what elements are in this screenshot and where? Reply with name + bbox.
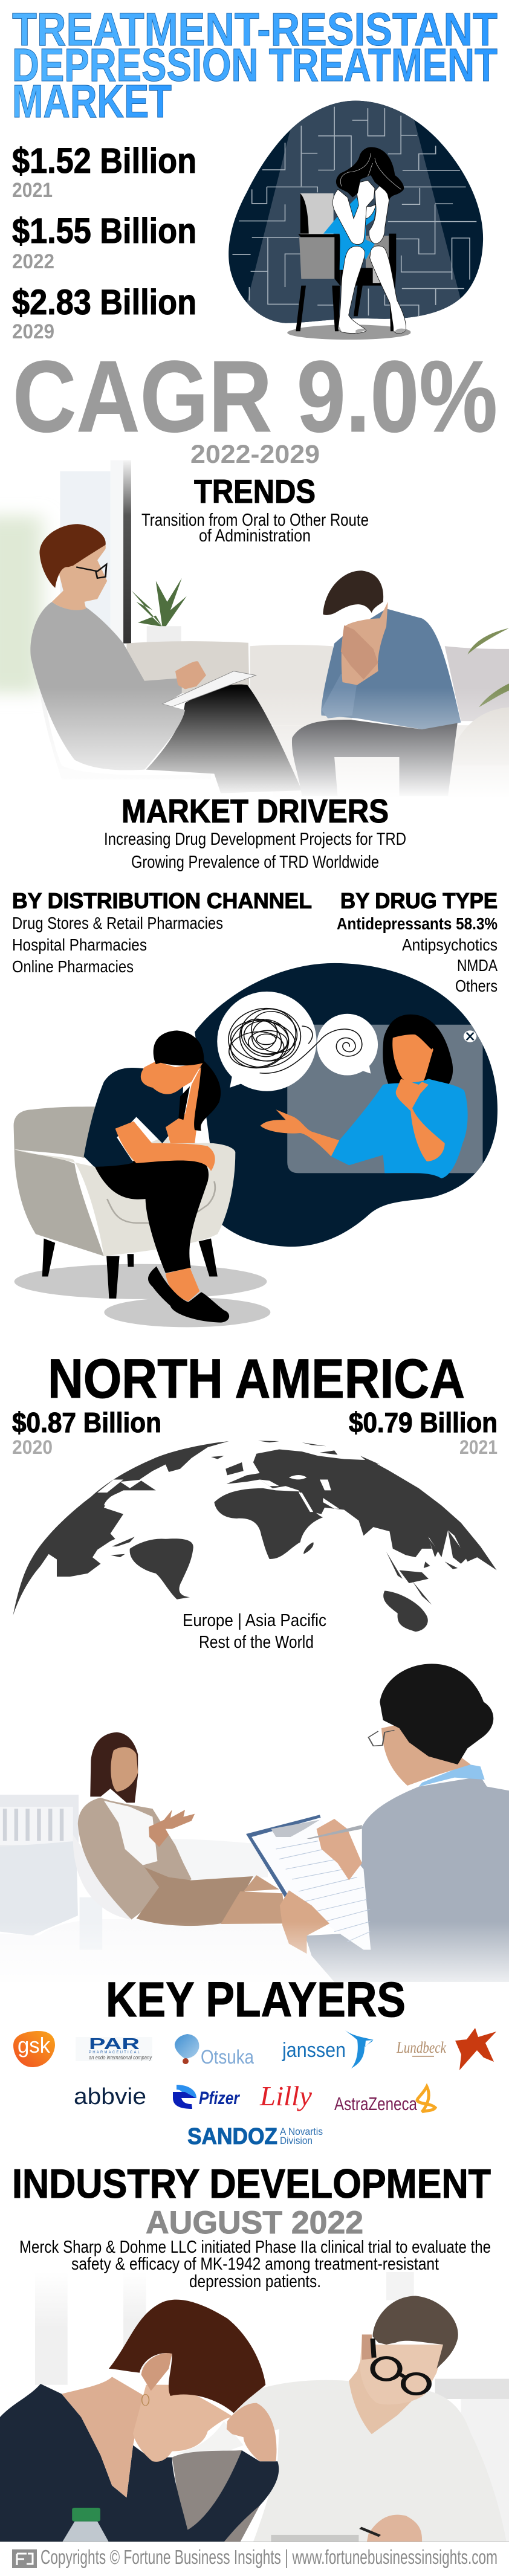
logo: Lundbeck: Lundbeck bbox=[396, 2039, 446, 2056]
heading: key players: KEY PLAYERS bbox=[106, 1972, 406, 2027]
plant bbox=[131, 578, 187, 643]
logo: gsk: gsk bbox=[18, 2033, 51, 2058]
logo: Par Pharmaceutical bbox=[76, 2035, 152, 2061]
logo: AstraZeneca: AstraZeneca bbox=[334, 2093, 418, 2114]
logo: Pfizer bbox=[173, 2085, 241, 2109]
trend text: Transition from Oral to Other Route bbox=[141, 511, 369, 530]
by drug type bbox=[337, 888, 498, 995]
logo: Janssen bbox=[282, 2030, 374, 2068]
value 2021: $0.79 Billion bbox=[349, 1407, 498, 1438]
date: AUGUST 2022 bbox=[146, 2205, 363, 2241]
channel list: Drug Stores & Retail Pharmacies bbox=[12, 914, 223, 932]
sofa bbox=[126, 628, 509, 798]
driver list bbox=[104, 830, 406, 872]
illustration: online therapy session bbox=[14, 963, 498, 1327]
shadow between figures bbox=[172, 2450, 260, 2542]
by drug type: BY DRUG TYPE bbox=[340, 888, 498, 913]
logo: Pfizer: Pfizer bbox=[199, 2088, 241, 2108]
logo: AbbVie: abbvie bbox=[74, 2084, 146, 2110]
patient bbox=[73, 1732, 286, 1926]
regions list bbox=[183, 1611, 326, 1652]
logo: Otsuka: Otsuka bbox=[201, 2046, 254, 2068]
region heading: North America bbox=[12, 1348, 498, 1458]
patient bbox=[292, 570, 461, 796]
by distribution channel bbox=[12, 888, 312, 976]
value 2021: $1.52 Billion bbox=[12, 141, 196, 181]
therapist on screen bbox=[261, 1015, 468, 1178]
key player logos bbox=[13, 2028, 496, 2149]
value 2022: 2022 bbox=[12, 250, 54, 273]
heading: trends: TRENDS bbox=[194, 473, 316, 510]
scribble and spiral bbox=[221, 999, 362, 1077]
speech bubbles bbox=[217, 992, 378, 1091]
floor shadows bbox=[15, 1264, 270, 1327]
doctor bbox=[246, 1664, 509, 1982]
driver list: Growing Prevalence of TRD Worldwide bbox=[131, 853, 379, 872]
drug type list: Others bbox=[455, 976, 498, 995]
water bottle bbox=[62, 2508, 109, 2542]
chair and woman bbox=[291, 147, 410, 339]
market drivers bbox=[104, 792, 406, 872]
sofa and room bbox=[0, 1795, 331, 1982]
seated person bbox=[84, 1030, 229, 1323]
therapist bbox=[30, 524, 302, 793]
world map bbox=[13, 1441, 497, 1632]
value 2020 bbox=[12, 1407, 161, 1458]
logo: Janssen: janssen bbox=[282, 2039, 346, 2062]
CAGR figure: 2022-2029 bbox=[190, 440, 320, 469]
room background bbox=[0, 460, 131, 693]
woman bbox=[0, 2300, 279, 2542]
photo: stressed woman and man with glasses bbox=[0, 2272, 509, 2542]
drug type list: NMDA bbox=[457, 956, 498, 975]
logo: Par Pharmaceutical: an endo international company bbox=[89, 2055, 152, 2061]
video close button bbox=[464, 1030, 476, 1042]
by distribution channel: BY DISTRIBUTION CHANNEL bbox=[12, 888, 312, 913]
value 2020: $0.87 Billion bbox=[12, 1407, 161, 1438]
bottom fade bbox=[0, 688, 509, 799]
armchair bbox=[14, 1106, 235, 1299]
value 2021: 2021 bbox=[12, 179, 53, 202]
driver list: Increasing Drug Development Projects for TRD bbox=[104, 830, 406, 849]
trend text: of Administration bbox=[199, 526, 311, 546]
illustration: woman in chair crying bbox=[229, 90, 483, 340]
value 2029: 2029 bbox=[12, 320, 54, 343]
value 2022: $1.55 Billion bbox=[12, 211, 196, 251]
industry development bbox=[12, 2161, 491, 2291]
logo: Sandoz: SANDOZ bbox=[187, 2124, 277, 2149]
backdrop blob with maze bbox=[229, 90, 483, 340]
regions list: Rest of the World bbox=[199, 1633, 314, 1652]
value 2021 bbox=[349, 1407, 498, 1458]
logo: Lundbeck bbox=[396, 2028, 496, 2070]
market values bbox=[12, 141, 196, 343]
development text: safety & efficacy of MK-1942 among treatment-resistant bbox=[71, 2255, 439, 2274]
channel list: Hospital Pharmacies bbox=[12, 935, 147, 954]
drug type list: Antipsychotics bbox=[402, 935, 498, 954]
channel list: Online Pharmacies bbox=[12, 957, 134, 976]
logo: Par Pharmaceutical: PAR bbox=[89, 2035, 140, 2053]
drug type list bbox=[337, 914, 498, 995]
title: MARKET bbox=[12, 76, 172, 128]
logo: Fortune Business Insights bbox=[12, 2549, 37, 2568]
regions list: Europe | Asia Pacific bbox=[183, 1611, 326, 1630]
development text bbox=[19, 2238, 491, 2291]
man bbox=[174, 2296, 461, 2542]
value 2022 bbox=[12, 211, 196, 273]
logo: Sandoz: Division bbox=[280, 2135, 313, 2146]
logo: gsk bbox=[13, 2031, 55, 2067]
channel list bbox=[12, 914, 223, 976]
logo: Lilly: Lilly bbox=[259, 2080, 313, 2111]
value 2020: 2020 bbox=[12, 1436, 53, 1458]
logo: Otsuka bbox=[175, 2034, 254, 2068]
trend text bbox=[141, 511, 369, 546]
value 2021: 2021 bbox=[459, 1436, 498, 1458]
title bbox=[12, 4, 498, 128]
photo: therapist and patient on sofa bbox=[0, 460, 509, 799]
development text: depression patients. bbox=[189, 2272, 321, 2291]
footer bbox=[12, 2546, 498, 2568]
background bbox=[35, 2272, 509, 2542]
value 2029: $2.83 Billion bbox=[12, 283, 196, 322]
photo: patient and doctor with clipboard bbox=[0, 1664, 509, 1982]
value 2021 bbox=[12, 141, 196, 202]
heading: trends bbox=[141, 473, 369, 546]
region heading: North America: NORTH AMERICA bbox=[48, 1348, 465, 1410]
logo: Sandoz: A Novartis bbox=[280, 2126, 323, 2137]
logo: Par Pharmaceutical: PHARMACEUTICAL bbox=[89, 2051, 140, 2055]
fade below doctor bbox=[0, 1922, 509, 1997]
market drivers: MARKET DRIVERS bbox=[122, 792, 389, 830]
value 2029 bbox=[12, 283, 196, 343]
